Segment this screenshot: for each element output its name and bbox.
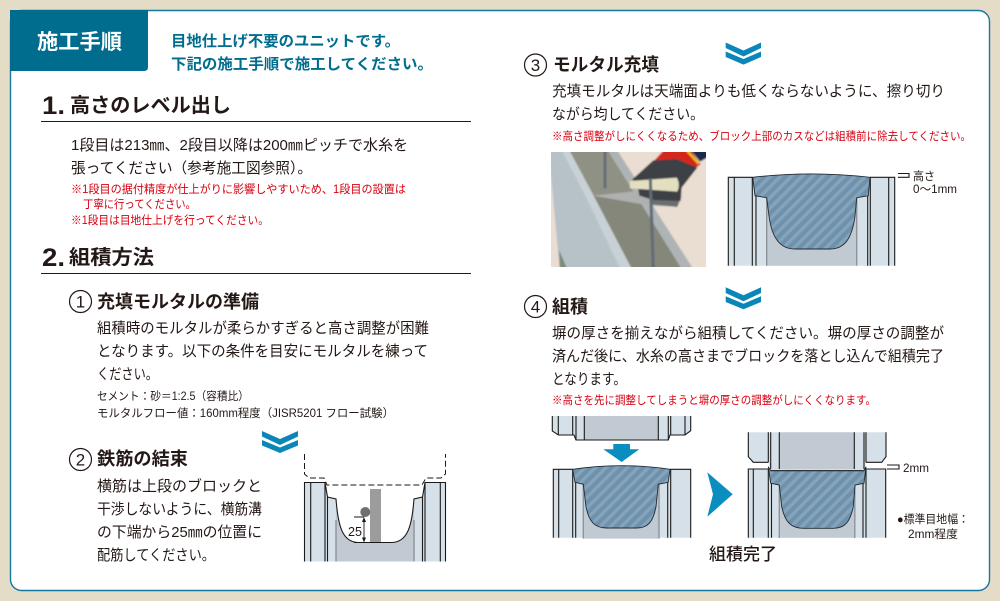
note: standard joint width: ●標準目地幅：: [897, 512, 969, 526]
text block: mortar preparation: モルタルフロー値：160mm程度（JISR5201 フロー試験）: [97, 406, 394, 420]
text block: rebar: の下端から25㎜の位置に: [97, 524, 262, 541]
note: standard joint width: 2mm程度: [908, 528, 959, 541]
mortar: [768, 467, 866, 528]
arrow: chevron down 3: [726, 287, 761, 309]
heading: step 2: [41, 244, 471, 274]
text block: mortar preparation: セメント：砂＝1:2.5（容積比）: [97, 389, 249, 403]
red notes: step 1: ※1段目は目地仕上げを行ってください。: [71, 213, 269, 227]
text block: rebar: 配筋してください。: [97, 547, 215, 564]
sub-heading: circled 1: 1: [76, 292, 85, 312]
diagram: rebar position: [304, 454, 446, 562]
diagram: mortar filled cross-section: [728, 170, 957, 266]
text block: rebar: [97, 477, 262, 564]
sub-heading: circled 2: 鉄筋の結束: [97, 449, 188, 469]
arrow: chevron down 1: [262, 431, 298, 453]
diagram: block set: [748, 432, 929, 538]
sub-heading: circled 1: 充填モルタルの準備: [97, 291, 259, 312]
heading: step 1: 高さのレベル出し: [70, 94, 231, 117]
text block: mortar preparation: [97, 320, 429, 420]
text block: filling: 充填モルタルは天端面よりも低くならないように、擦り切り: [552, 83, 945, 100]
text block: filling: ながら均してください。: [552, 106, 704, 123]
lead text: 下記の施工手順で施工してください。: [171, 55, 433, 73]
text block: rebar: 干渉しないように、横筋溝: [97, 501, 262, 518]
text block: step 1 body: 1段目は213㎜、2段目以降は200㎜ピッチで水糸を: [71, 137, 408, 154]
text block: mortar preparation: 組積時のモルタルが柔らかすぎると高さ調整が困難: [97, 320, 429, 337]
text block: masonry: 塀の厚さを揃えながら組積してください。塀の厚さの調整が: [552, 325, 944, 342]
diagram: block descending: [552, 416, 691, 539]
text block: rebar: 横筋は上段のブロックと: [97, 477, 262, 495]
note: standard joint width: [897, 512, 969, 541]
heading: step 1: [41, 92, 471, 122]
text block: masonry: 済んだ後に、水糸の高さまでブロックを落とし込んで組積完了: [552, 347, 944, 365]
joint tick: [887, 465, 899, 469]
sub-heading: circled 4: [524, 296, 588, 318]
text block: step 1 body: [71, 137, 408, 177]
text block: mortar preparation: となります。以下の条件を目安にモルタルを練って: [97, 343, 428, 360]
lead text: 目地仕上げ不要のユニットです。: [171, 33, 400, 50]
text block: step 1 body: 張ってください（参考施工図参照）。: [71, 160, 312, 177]
text block: filling: [552, 83, 945, 123]
sub-heading: circled 2: 2: [76, 450, 85, 470]
red note: step 4: ※高さを先に調整してしまうと塀の厚さの調整がしにくくなります。: [552, 393, 876, 407]
label: 25: 25: [348, 524, 362, 539]
photo: trowel on wall: [551, 152, 706, 267]
lead text: [171, 33, 433, 73]
red notes: step 1: [71, 182, 406, 227]
sub-heading: circled 4: 組積: [552, 297, 588, 317]
text block: mortar preparation: ください。: [97, 366, 158, 383]
label: height: [913, 170, 957, 196]
sub-heading: circled 3: モルタル充填: [553, 55, 659, 75]
red notes: step 1: 丁寧に行ってください。: [83, 198, 196, 211]
sub-heading: circled 4: 4: [531, 298, 540, 316]
arrow: chevron down 2: [726, 42, 761, 65]
red notes: step 1: ※1段目の据付精度が仕上がりに影響しやすいため、1段目の設置は: [71, 182, 406, 196]
mortar: [753, 174, 870, 249]
height tick: [898, 174, 909, 177]
heading: step 2: 組積方法: [69, 246, 154, 269]
title: 施工手順: [37, 31, 122, 54]
sub-heading: circled 3: 3: [531, 56, 540, 75]
sub-heading: circled 2: [70, 448, 188, 470]
heading: step 2: 2.: [42, 244, 65, 272]
arrow: big right: [707, 472, 733, 517]
arrow: down: [603, 444, 639, 462]
red note: step 3: ※高さ調整がしにくくなるため、ブロック上部のカスなどは組積前に除去してください。: [552, 129, 971, 143]
text block: masonry: [552, 325, 944, 388]
label: height: 0〜1mm: [913, 184, 957, 196]
heading: step 1: 1.: [42, 92, 65, 120]
caption: completed: 組積完了: [709, 545, 777, 564]
label: height: 高さ: [913, 170, 935, 183]
label: 2mm: 2mm: [903, 463, 929, 475]
header tab: [10, 10, 148, 71]
text block: masonry: となります。: [552, 371, 626, 388]
mortar: [573, 466, 670, 528]
